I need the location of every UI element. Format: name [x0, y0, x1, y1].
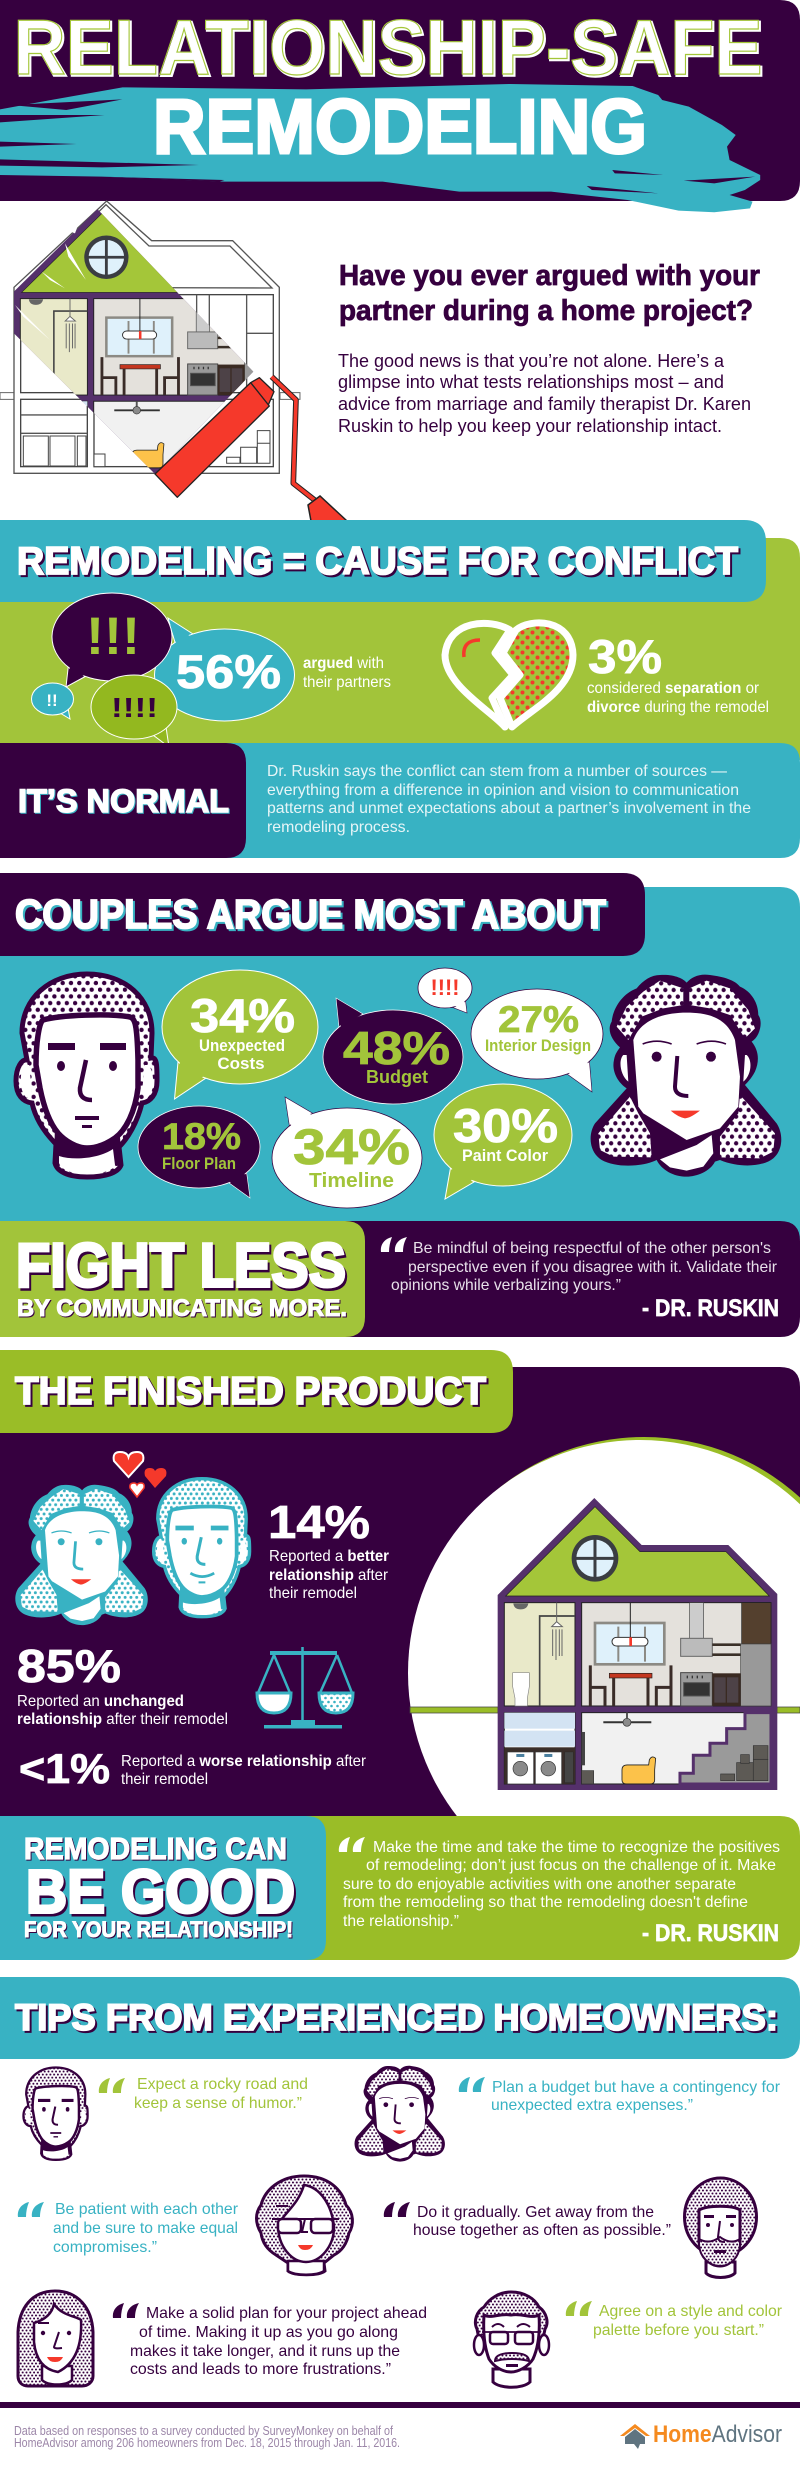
bubble: 34% unexpected costs: Unexpected — [199, 1036, 285, 1055]
quote: make the time — [343, 1839, 780, 1930]
intro paragraph: The good news is that you’re not alone. Here’s a — [338, 350, 725, 371]
tip 5 face: woman with long hair — [18, 2291, 93, 2386]
speech bubble: small teal: !! — [46, 691, 58, 710]
panel: it's normal — [0, 743, 800, 858]
title: relationship-safe: RELATIONSHIP-SAFE — [14, 3, 762, 91]
intro paragraph: Ruskin to help you keep your relationship intact. — [338, 415, 722, 436]
quote: make the time: of remodeling; don’t just focus on the challenge of it. Make — [366, 1857, 776, 1874]
stat: 14%: 14% — [268, 1496, 370, 1548]
banner: tips from experienced homeowners: TIPS FROM EXPERIENCED HOMEOWNERS: — [17, 1999, 780, 2040]
attribution: - DR. RUSKIN — [642, 1295, 779, 1322]
tip 3 quote: Be patient with each other — [55, 2201, 239, 2218]
bubble: 34% timeline: Timeline — [309, 1170, 394, 1192]
icon: broken heart — [445, 623, 573, 727]
stat text: better: Reported a better — [269, 1548, 389, 1565]
bubble: small red exclamation — [418, 968, 472, 1013]
face: woman — [591, 975, 781, 1177]
stat: less than 1%: <1% — [19, 1745, 110, 1792]
footer source note: Data based on responses to a survey conducted by SurveyMonkey on behalf of — [14, 2424, 393, 2438]
tip 4 quote: house together as often as possible.” — [413, 2222, 671, 2239]
bubble: 27% interior design — [471, 989, 603, 1092]
stat text: separation — [587, 680, 769, 716]
panel: remodeling can be good — [0, 1816, 800, 1960]
heading: remodeling can: REMODELING CAN — [25, 1832, 288, 1867]
stat text: worse: their remodel — [121, 1771, 208, 1788]
heading: couples argue most about: COUPLES ARGUE MOST ABOUT — [15, 891, 606, 937]
quote: be mindful: Be mindful of being respectful of the other person's — [413, 1240, 771, 1257]
tip 4 quote: Do it gradually. Get away from the — [417, 2204, 654, 2221]
tip 5 quote: makes it take longer, and it runs up the — [130, 2343, 400, 2360]
bubble: 27% interior design: 27% — [498, 999, 579, 1040]
banner: tips from experienced homeowners: TIPS FROM EXPERIENCED HOMEOWNERS: — [15, 1997, 778, 2038]
intro heading: partner during a home project? — [339, 295, 753, 327]
title: relationship-safe: RELATIONSHIP-SAFE — [15, 4, 764, 92]
tip 2 face: woman — [355, 2066, 445, 2162]
tip 5 quote: of time. Making it up as you go along — [139, 2324, 398, 2341]
stat text: argued — [303, 655, 391, 691]
stat text: better: relationship after — [269, 1567, 389, 1584]
panel: couples argue most about — [0, 873, 800, 1240]
footer source note — [14, 2424, 400, 2450]
stat text: separation: divorce during the remodel — [587, 699, 769, 716]
paragraph: conflict sources — [267, 763, 751, 836]
bubble: 18% floor plan: 18% — [162, 1116, 241, 1157]
tip 6 quote: Agree on a style and color — [599, 2303, 783, 2320]
bubble: 48% budget: 48% — [343, 1022, 450, 1074]
illustration: finished house — [410, 1498, 800, 1790]
banner: tips from experienced homeowners — [0, 1977, 800, 2059]
illustration: house being painted with a roller — [0, 201, 347, 521]
intro paragraph: advice from marriage and family therapist Dr. Karen — [338, 393, 751, 414]
stat text: unchanged — [17, 1693, 228, 1728]
tip 5 quote: Make a solid plan for your project ahead — [146, 2305, 427, 2322]
quote: be mindful: opinions while verbalizing yours.” — [391, 1277, 621, 1294]
bubble: 34% unexpected costs: 34% — [190, 989, 295, 1042]
quote: make the time: Make the time and take the time to recognize the positives — [373, 1839, 780, 1856]
heading: fight less: FIGHT LESS — [16, 1232, 346, 1300]
tip 3 quote: compromises.” — [53, 2239, 157, 2256]
bubble: 48% budget: Budget — [366, 1067, 428, 1087]
tip 5 quote: costs and leads to more frustrations.” — [130, 2361, 391, 2378]
bubble: 48% budget — [323, 998, 463, 1104]
heading: remodeling can: REMODELING CAN — [24, 1831, 287, 1866]
tip 2 quote — [459, 2077, 781, 2114]
tip 2 quote: Plan a budget but have a contingency for — [492, 2079, 781, 2096]
tip 3 quote — [18, 2201, 239, 2256]
tip 3 face: woman with glasses — [256, 2176, 352, 2275]
quote: be mindful — [391, 1240, 778, 1294]
bubble: 34% unexpected costs — [162, 970, 318, 1099]
teal paint stroke — [0, 84, 760, 212]
heading: be good: BE GOOD — [28, 1860, 297, 1928]
tip 6 quote: palette before you start.” — [593, 2322, 764, 2339]
subheading: by communicating more: BY COMMUNICATING MORE. — [18, 1296, 348, 1323]
logo: HomeAdvisor: HomeAdvisor — [653, 2421, 782, 2448]
bubble: 27% interior design: Interior Design — [485, 1036, 591, 1055]
heading: be good: BE GOOD — [26, 1858, 295, 1926]
tip 4 face: bearded man — [684, 2178, 756, 2278]
icon: balance scale — [257, 1647, 353, 1728]
stat: 85%: 85% — [17, 1640, 121, 1692]
intro heading — [339, 260, 760, 327]
intro heading: Have you ever argued with your — [339, 260, 760, 292]
tip 3 quote: and be sure to make equal — [53, 2220, 238, 2237]
quote mark — [339, 1837, 365, 1852]
panel: the finished product — [0, 1350, 800, 1816]
stat text: worse — [121, 1753, 367, 1788]
title: remodeling: REMODELING — [153, 84, 647, 170]
heading: couples argue most about: COUPLES ARGUE MOST ABOUT — [17, 893, 608, 939]
speech bubble: purple exclamation: !!! — [86, 607, 140, 666]
stat text: unchanged: Reported an unchanged — [17, 1693, 184, 1710]
tip 1 quote: Expect a rocky road and — [137, 2076, 308, 2093]
speech bubble: teal 56%: 56% — [176, 645, 281, 698]
paragraph: conflict sources: remodeling process. — [267, 819, 410, 836]
intro paragraph: glimpse into what tests relationships most – and — [338, 371, 724, 392]
heading: remodeling = cause for conflict: REMODELING = CAUSE FOR CONFLICT — [19, 542, 740, 585]
tip 1 quote — [99, 2076, 308, 2112]
bubble: small red exclamation: !!!! — [430, 975, 460, 1000]
stat text: better — [269, 1548, 389, 1602]
attribution: - DR. RUSKIN — [642, 1920, 779, 1947]
bubble: 30% paint color — [434, 1084, 572, 1199]
paragraph: conflict sources: patterns and unmet expectations about a partner’s involvement in the — [267, 800, 751, 817]
panel: fight less — [0, 1221, 800, 1337]
tip 1 face: man — [23, 2067, 88, 2160]
heading: the finished product: THE FINISHED PRODUCT — [17, 1372, 488, 1415]
bubble: 30% paint color: Paint Color — [462, 1146, 548, 1165]
tip 5 quote — [113, 2303, 427, 2378]
bubble: 34% unexpected costs: Costs — [217, 1054, 265, 1073]
stat text: unchanged: relationship after their remodel — [17, 1711, 228, 1728]
speech bubble: purple exclamation — [52, 593, 172, 687]
quote mark — [381, 1237, 407, 1252]
stat text: separation: considered separation or — [587, 680, 760, 697]
icon: hearts — [114, 1452, 166, 1497]
heading: for your relationship: FOR YOUR RELATIONSHIP! — [25, 1918, 294, 1943]
bubble: 34% timeline: 34% — [293, 1119, 410, 1175]
speech bubble: green exclamation — [91, 675, 177, 747]
stat: 3%: 3% — [588, 630, 662, 683]
bubble: 34% timeline — [272, 1097, 422, 1208]
bubble: 18% floor plan: Floor Plan — [162, 1154, 236, 1173]
quote: make the time: from the remodeling so that the remodeling doesn't define — [343, 1894, 748, 1911]
tip 6 face: man with glasses and mustache — [474, 2292, 549, 2387]
heading: the finished product: THE FINISHED PRODUCT — [15, 1370, 486, 1413]
quote: make the time: the relationship.” — [343, 1913, 459, 1930]
tip 2 quote: unexpected extra expenses.” — [491, 2097, 693, 2114]
heading: remodeling = cause for conflict: REMODELING = CAUSE FOR CONFLICT — [17, 540, 738, 583]
quote: be mindful: perspective even if you disagree with it. Validate their — [408, 1259, 778, 1276]
panel: cause for conflict — [0, 520, 800, 760]
heading: for your relationship: FOR YOUR RELATIONSHIP! — [24, 1917, 293, 1942]
heading: fight less: FIGHT LESS — [18, 1234, 348, 1303]
tip 4 quote — [384, 2202, 671, 2239]
speech bubble: green exclamation: !!!! — [111, 692, 158, 723]
paragraph: conflict sources: everything from a difference in opinion and vision to communication — [267, 782, 739, 799]
subheading: by communicating more: BY COMMUNICATING MORE. — [17, 1295, 347, 1322]
stat text: better: their remodel — [269, 1585, 357, 1602]
stat text: argued: argued with — [303, 655, 384, 672]
tip 1 quote: keep a sense of humor.” — [134, 2095, 302, 2112]
stat text: worse: Reported a worse relationship after — [121, 1753, 367, 1770]
bubble: 30% paint color: 30% — [453, 1099, 558, 1152]
face: man — [16, 974, 157, 1177]
speech bubble: teal 56% — [154, 618, 294, 721]
quote: make the time: sure to do enjoyable activities with one another separate — [343, 1876, 736, 1893]
speech bubble: small teal — [32, 683, 74, 719]
heading: it's normal: IT’S NORMAL — [19, 784, 230, 820]
heading: it's normal: IT’S NORMAL — [18, 783, 229, 819]
bubble: 18% floor plan — [138, 1106, 260, 1198]
intro paragraph — [338, 350, 751, 436]
footer source note: HomeAdvisor among 206 homeowners from Dec. 18, 2015 through Jan. 11, 2016. — [14, 2436, 400, 2450]
icon: teal couple — [15, 1479, 250, 1625]
header banner — [0, 0, 800, 212]
stat text: argued: their partners — [303, 674, 391, 691]
paragraph: conflict sources: Dr. Ruskin says the conflict can stem from a number of sources — — [267, 763, 727, 780]
tip 6 quote — [566, 2301, 783, 2339]
